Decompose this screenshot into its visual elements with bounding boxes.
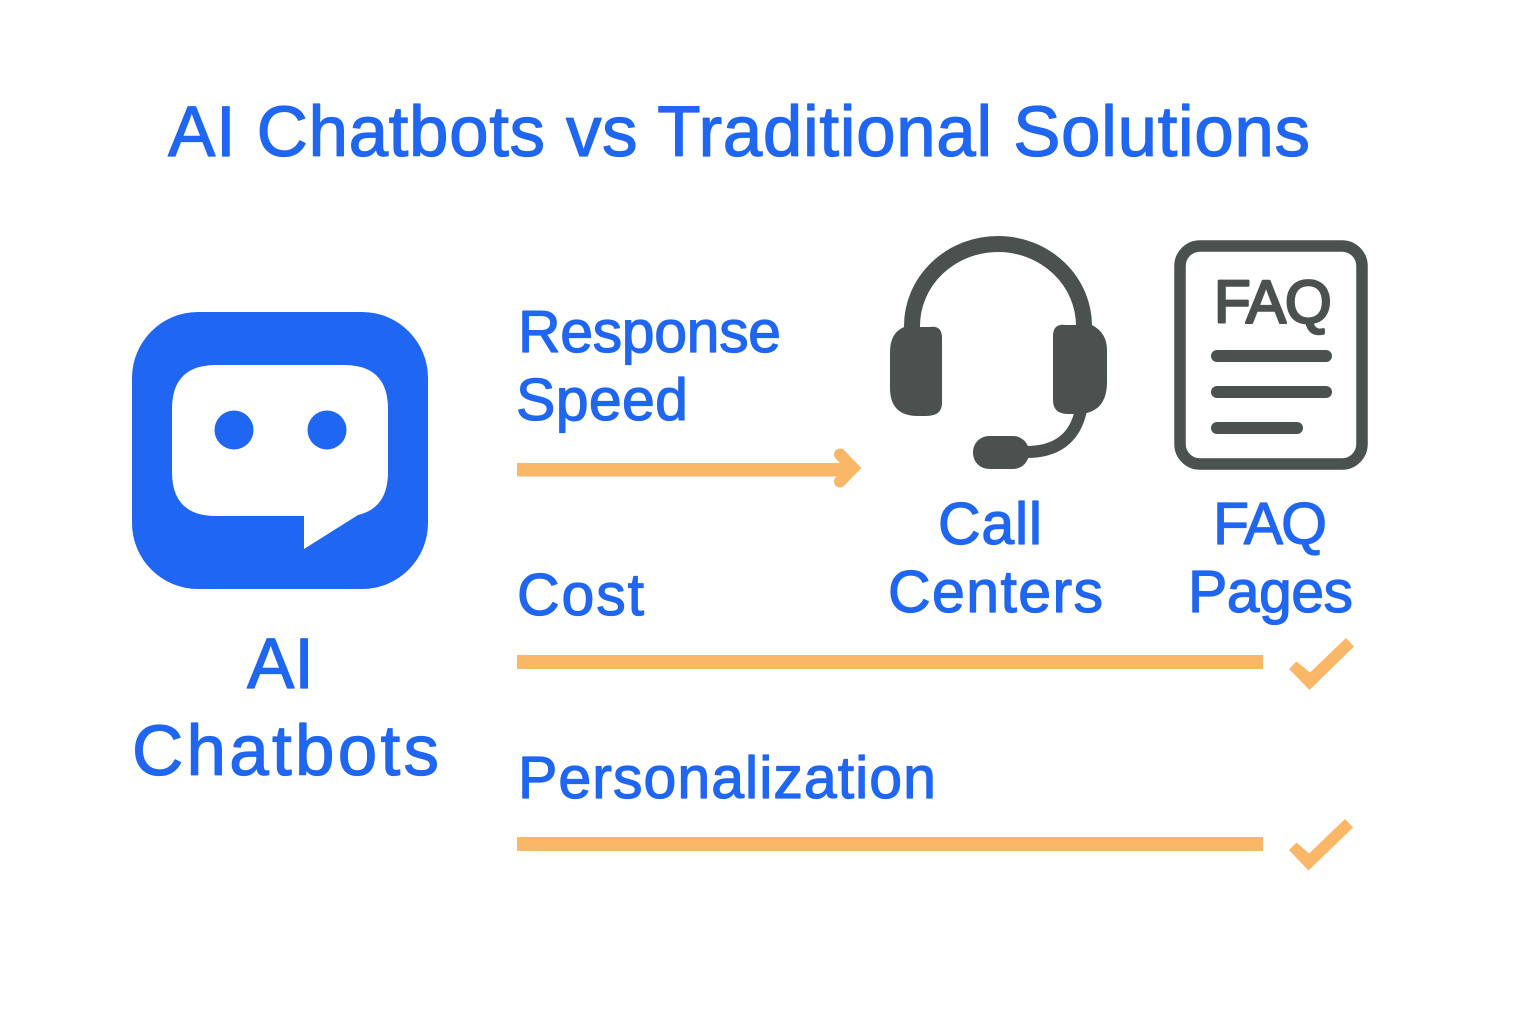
arrow <box>517 454 853 482</box>
row: response speed <box>516 299 853 482</box>
label: Response Speed: Response <box>518 299 781 365</box>
label: FAQ Pages: Pages <box>1188 559 1353 625</box>
label: Cost: Cost <box>517 562 644 628</box>
label: Call Centers: Call <box>938 491 1042 557</box>
label: AI Chatbots <box>132 625 439 791</box>
label: AI Chatbots: Chatbots <box>132 712 439 791</box>
icon: check <box>1290 820 1352 870</box>
label: FAQ Pages: FAQ <box>1213 491 1327 557</box>
row: personalization <box>517 745 1352 870</box>
bar <box>517 655 1263 669</box>
label: Call Centers <box>888 491 1103 625</box>
bar <box>517 837 1263 851</box>
title: AI Chatbots vs Traditional Solutions <box>168 93 1310 172</box>
label: AI Chatbots: AI <box>247 625 314 704</box>
panel: AI chatbots <box>132 312 439 791</box>
icon: headset <box>890 244 1107 469</box>
label: Personalization: Personalization <box>518 745 936 811</box>
label: FAQ Pages <box>1188 491 1353 625</box>
icon: FAQ page <box>1180 246 1362 464</box>
FAQ text: FAQ <box>1214 268 1332 336</box>
row: cost <box>517 562 1353 689</box>
icon: check <box>1290 639 1353 689</box>
label: Response Speed <box>516 299 781 433</box>
page lines <box>1217 356 1326 428</box>
label: Call Centers: Centers <box>888 559 1103 625</box>
icon: chatbot <box>132 312 428 589</box>
label: Response Speed: Speed <box>516 367 688 433</box>
